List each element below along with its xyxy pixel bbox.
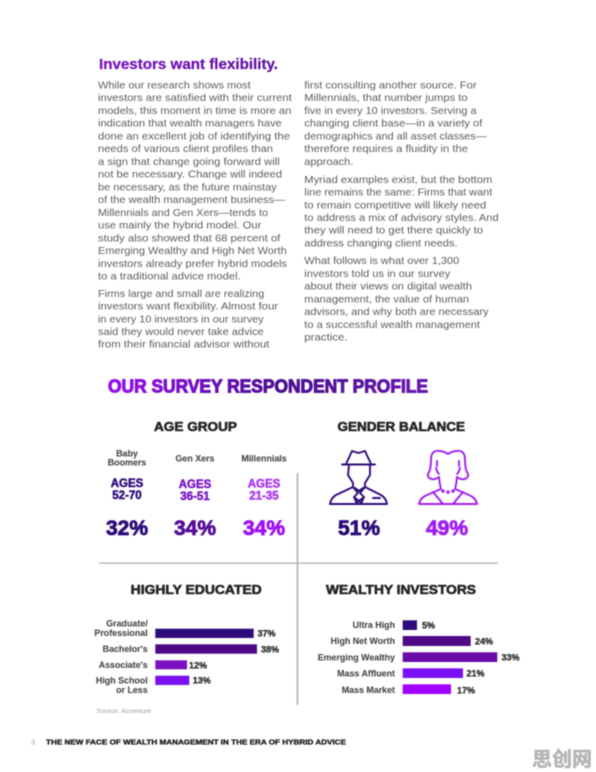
text block: left column: models, this moment in time is more an — [98, 105, 291, 117]
bar chart: wealth segments: 5% — [422, 620, 435, 630]
column: millennials: AGES — [248, 478, 281, 490]
footer: report title: THE NEW FACE OF WEALTH MANAGEMENT IN THE ERA OF HYBRID ADVICE — [46, 740, 346, 746]
text block: left column: in every 10 investors in our survey — [98, 313, 264, 325]
bar chart: wealth segments: 24% — [475, 636, 493, 646]
column: gen xers: AGES — [179, 479, 212, 491]
text block: right column: about their views on digital wealth — [304, 281, 472, 293]
bar chart: wealth segments: 17% — [457, 685, 475, 695]
text block: right column: they will need to get there quickly to — [304, 225, 483, 237]
text block: left column: of the wealth management business— — [98, 194, 286, 206]
text block: left column: Emerging Wealthy and High Net Worth — [98, 245, 287, 257]
column: gen xers: Gen Xers — [176, 454, 215, 464]
text block: right column: line remains the same: Firms that want — [304, 186, 492, 198]
text block: left column: needs of various client profiles than — [98, 143, 273, 155]
text block: left column: Millennials and Gen Xers—tends to — [98, 207, 268, 219]
text block: right column: to a successful wealth management — [304, 319, 480, 331]
column: millennials — [241, 454, 287, 540]
text block: right column: advisors, and why both are necessary — [304, 306, 489, 318]
text block: right column: Myriad examples exist, but the bottom — [304, 174, 493, 186]
source note: Source: Accenture — [96, 709, 152, 715]
bar chart: education levels — [94, 618, 279, 695]
text block: left column: use mainly the hybrid model. Our — [98, 220, 262, 232]
column: baby boomers — [106, 448, 148, 540]
bar chart: education levels: Bachelor's — [103, 644, 148, 654]
column: baby boomers: Baby — [116, 448, 138, 458]
column: millennials: Millennials — [241, 454, 287, 464]
column: millennials: 21-35 — [249, 490, 279, 502]
text block: left column: investors are satisfied with their current — [98, 92, 292, 104]
text block: right column: five in every 10 investors. Serving a — [304, 105, 477, 117]
column: millennials: 34% — [243, 517, 285, 540]
text block: right column — [304, 80, 499, 344]
column: baby boomers: 52-70 — [112, 490, 142, 502]
panel: gender balance — [330, 419, 477, 540]
text block: left column: done an excellent job of identifying the — [98, 130, 290, 142]
bar chart: wealth segments: Emerging Wealthy — [318, 652, 395, 662]
icon: woman — [419, 451, 477, 504]
text block: right column: practice. — [304, 332, 348, 344]
bar chart: education levels: High School — [96, 676, 148, 686]
bar chart: wealth segments: Mass Market — [342, 685, 395, 695]
bar chart: wealth segments: Ultra High — [353, 620, 395, 630]
text block: right column: management, the value of human — [304, 293, 469, 305]
text block: left column: Firms large and small are realizing — [98, 288, 264, 300]
column: gen xers: 36-51 — [180, 491, 210, 503]
column: gen xers — [174, 454, 216, 540]
panel: wealthy investors — [318, 582, 520, 695]
panel: age group — [106, 419, 287, 540]
text block: right column: to address a mix of advisory styles. And — [304, 212, 499, 224]
column: baby boomers: AGES — [111, 478, 144, 490]
text block: left column — [98, 80, 292, 351]
text block: right column: to remain competitive will likely need — [304, 199, 486, 211]
value: 51%: 51% — [338, 517, 380, 540]
panel: highly educated — [94, 582, 279, 695]
heading: wealthy investors: WEALTHY INVESTORS — [326, 582, 476, 597]
bar chart: wealth segments: 21% — [466, 668, 485, 678]
text block: left column: not be necessary. Change will indeed — [98, 169, 282, 181]
text block: left column: While our research shows most — [98, 80, 251, 92]
bar chart: education levels: Associate's — [99, 660, 148, 670]
heading: our survey respondent profile: OUR SURVEY RESPONDENT PROFILE — [108, 376, 428, 396]
bar chart: education levels: or Less — [116, 685, 148, 695]
bar chart: education levels: Professional — [94, 628, 148, 638]
column: baby boomers: 32% — [106, 517, 148, 540]
heading: investors want flexibility: Investors want flexibility. — [99, 57, 278, 73]
text block: left column: said they would never take advice — [98, 326, 264, 338]
value: 49%: 49% — [426, 517, 468, 540]
text block: right column: address changing client needs. — [304, 238, 458, 250]
text block: left column: study also showed that 68 percent of — [98, 232, 280, 244]
text block: right column: demographics and all asset classes— — [304, 130, 487, 142]
text block: left column: from their financial advisor without — [98, 339, 269, 351]
text block: right column: What follows is what over 1,300 — [304, 255, 459, 267]
text block: right column: investors told us in our survey — [304, 268, 451, 280]
text block: right column: approach. — [304, 156, 353, 168]
heading: highly educated: HIGHLY EDUCATED — [131, 582, 262, 597]
bar chart: education levels: Graduate/ — [106, 618, 148, 628]
bar chart: wealth segments — [318, 620, 520, 695]
heading: age group: AGE GROUP — [154, 419, 237, 434]
text block: right column: changing client base—in a variety of — [304, 118, 482, 130]
bar chart: education levels: 12% — [189, 660, 207, 670]
bar chart: wealth segments: High Net Worth — [331, 636, 395, 646]
text block: right column: Millennials, that number jumps to — [304, 92, 468, 104]
text block: right column: first consulting another source. For — [304, 80, 477, 92]
footer: page number: 3 — [31, 740, 35, 746]
column: baby boomers: Boomers — [108, 458, 146, 468]
heading: gender balance: GENDER BALANCE — [338, 419, 465, 434]
text block: left column: investors want flexibility. Almost four — [98, 300, 279, 312]
text block: right column: therefore requires a fluidity in the — [304, 143, 468, 155]
icon: man with hat — [330, 451, 387, 504]
bar chart: education levels: 38% — [261, 644, 279, 654]
text block: left column: a sign that change going forward will — [98, 156, 280, 168]
text block: left column: indication that wealth managers have — [98, 118, 282, 130]
text block: left column: to a traditional advice model. — [98, 270, 241, 282]
text block: left column: be necessary, as the future mainstay — [98, 181, 277, 193]
bar chart: education levels: 37% — [258, 628, 276, 638]
column: gen xers: 34% — [174, 517, 216, 540]
text block: left column: investors already prefer hybrid models — [98, 258, 287, 270]
watermark: 思创网 — [532, 748, 592, 771]
bar chart: wealth segments: Mass Affluent — [337, 668, 395, 678]
bar chart: education levels: 13% — [193, 675, 211, 685]
bar chart: wealth segments: 33% — [502, 652, 520, 662]
